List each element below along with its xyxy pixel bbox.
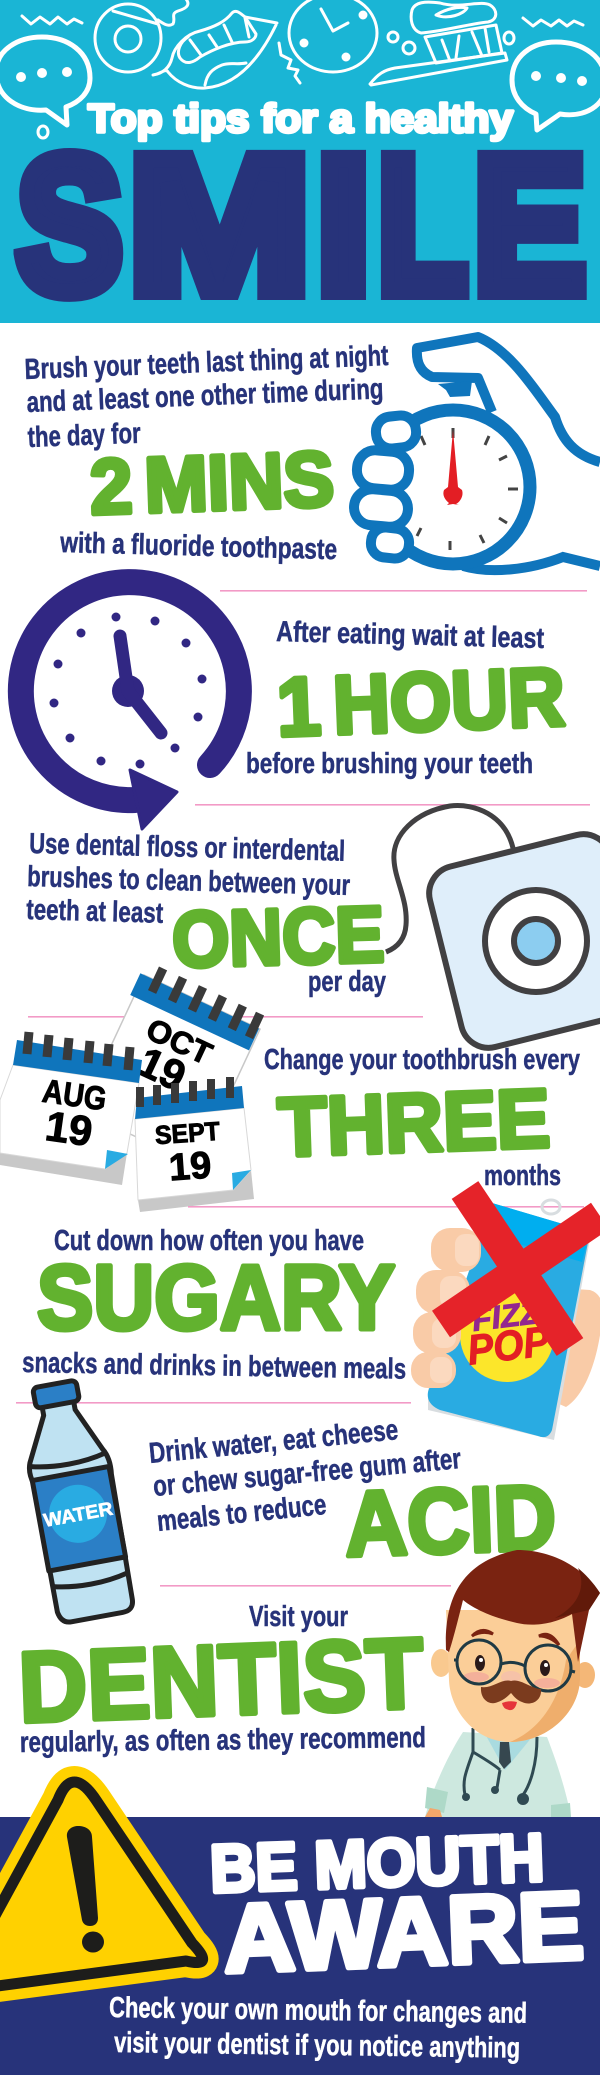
icon: October calendar: OCT (141, 1011, 217, 1072)
ears (431, 1649, 451, 1677)
text: brush instructions: Brush your teeth last thing at night (24, 340, 389, 386)
text: drink water: or chew sugar-free gum after (152, 1443, 462, 1503)
icon: left speech bubble (0, 37, 90, 125)
glasses (454, 1640, 575, 1691)
icon: August calendar: 19 (43, 1102, 95, 1155)
highlight: 2 MINS: 2 MINS (89, 435, 335, 531)
text: with a fluoride toothpaste: with a fluoride toothpaste (59, 527, 338, 566)
text: use dental floss: Use dental floss or interdental (29, 828, 346, 868)
coat (425, 1732, 571, 1817)
text: regularly: regularly, as often as they recommend (20, 1722, 426, 1759)
heading: SMILE: I (317, 116, 370, 332)
panel: header (0, 0, 600, 323)
heading: SMILE: L (378, 116, 467, 332)
text: snacks and drinks: snacks and drinks in between meals (22, 1347, 406, 1386)
moustache (481, 1680, 541, 1703)
highlight: ONCE: ONCE (171, 889, 385, 984)
cheeks (463, 1672, 489, 1682)
text: brush instructions: the day for (27, 418, 141, 454)
text: use dental floss (26, 828, 351, 930)
text: months: months (484, 1160, 561, 1192)
icon: hand holding stopwatch (353, 337, 600, 570)
icon: August calendar (0, 1032, 142, 1185)
icon: September calendar (135, 1077, 254, 1212)
icon: clock with arrow (21, 582, 239, 829)
text: drink water: meals to reduce (155, 1489, 328, 1538)
icon: clock doodle (289, 0, 377, 72)
hair (446, 1550, 600, 1662)
icon: toothbrush doodle (38, 2, 514, 138)
subtitle: Top tips for a healthy (88, 97, 514, 141)
heading: SMILE: E (474, 116, 585, 332)
text: per day: per day (308, 966, 386, 998)
icon: calendars (0, 961, 266, 1212)
highlight: DENTIST: DENTIST (17, 1617, 426, 1744)
panel: be mouth aware (0, 1782, 600, 2075)
heading: AWARE: AWARE (222, 1872, 586, 1993)
text: drink water: Drink water, eat cheese (148, 1414, 400, 1470)
icon: dentist character (425, 1550, 600, 1817)
tip: brush two minutes (24, 337, 600, 570)
icon: right speech bubble (512, 42, 600, 130)
nose (501, 1671, 521, 1683)
text: use dental floss: teeth at least (26, 894, 164, 930)
icon: red cross (441, 1190, 600, 1347)
label: FIZZ POP (462, 1293, 553, 1374)
tip: visit dentist (17, 1550, 600, 1817)
icon: August calendar: AUG (40, 1072, 109, 1117)
text: brush instructions: and at least one other time during (26, 373, 384, 419)
brows (472, 1630, 559, 1645)
highlight: 1 HOUR: 1 HOUR (275, 650, 566, 754)
tip: reduce acid (15, 1377, 558, 1624)
mouth (502, 1701, 517, 1710)
icon: floss doodle (95, 0, 188, 72)
icon: October calendar: 19 (131, 1038, 193, 1100)
text: cut down: Cut down how often you have (54, 1225, 364, 1257)
text: check your mouth (109, 1992, 527, 2065)
tip: cut down sugar (22, 1190, 600, 1440)
icon: mouth doodle (153, 11, 277, 88)
icon: warning triangle (0, 1782, 203, 1991)
highlight: ACID: ACID (343, 1467, 558, 1576)
heading: SMILE (14, 116, 587, 332)
heading: BE MOUTH: BE MOUTH (209, 1820, 545, 1907)
highlight: THREE: THREE (276, 1072, 551, 1174)
label: FIZZ POP: FIZZ (470, 1294, 543, 1338)
heading: SMILE: S (17, 116, 122, 332)
tip: floss once (26, 806, 600, 1054)
highlight: SUGARY: SUGARY (37, 1247, 395, 1349)
text: brush instructions (24, 340, 389, 454)
icon: September calendar: 19 (168, 1145, 213, 1189)
heading: SMILE: M (129, 116, 310, 332)
label: WATER: WATER (42, 1499, 115, 1532)
tip: change toothbrush (0, 961, 580, 1212)
icon: October calendar (77, 961, 266, 1165)
label: FIZZ POP: POP (465, 1317, 553, 1374)
tip: wait one hour (21, 582, 566, 829)
icon: fizzy drink in hand with red cross (411, 1190, 600, 1440)
icon: September calendar: SEPT (154, 1116, 221, 1150)
icon: water bottle (15, 1377, 137, 1624)
face (446, 1610, 580, 1742)
icon: zigzag doodles (22, 16, 583, 83)
eyes (475, 1655, 485, 1671)
icon: dental floss box (386, 806, 600, 1054)
text: drink water (148, 1414, 462, 1538)
text: visit your: Visit your (249, 1601, 348, 1633)
text: use dental floss: brushes to clean between your (27, 861, 351, 902)
